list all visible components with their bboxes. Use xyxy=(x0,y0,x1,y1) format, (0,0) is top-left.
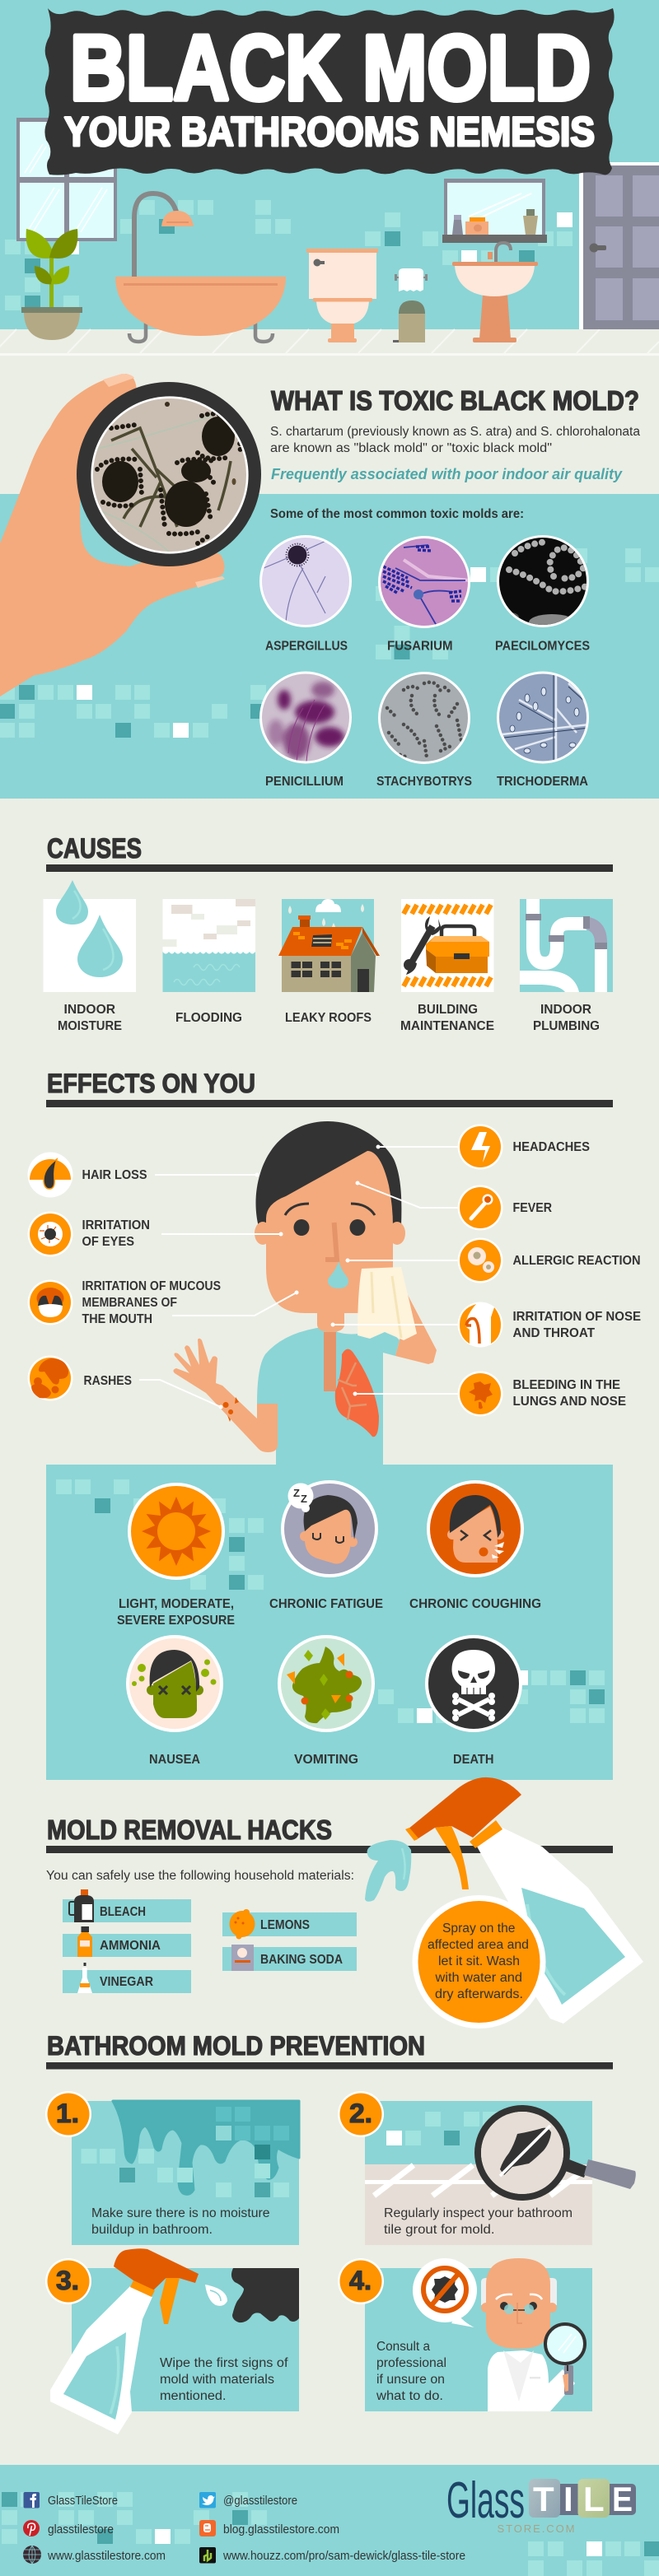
label: allergic reaction: ALLERGIC REACTION xyxy=(512,1254,641,1268)
social: facebook: GlassTileStore xyxy=(48,2494,118,2508)
material: vinegar xyxy=(63,1963,191,1993)
step 3 card xyxy=(50,2248,299,2434)
step 1 number xyxy=(45,2091,91,2137)
social: facebook xyxy=(23,2492,118,2508)
section: effects on you xyxy=(46,1069,613,1107)
cause label: indoor plumbing xyxy=(533,1003,600,1033)
step 3 card: mentioned. xyxy=(160,2389,226,2403)
step 3 card: Wipe the first signs of xyxy=(160,2356,288,2370)
teal highlight: Frequently associated with poor indoor air quality xyxy=(271,466,623,482)
doctor xyxy=(481,2258,585,2411)
label: irritation of eyes: IRRITATION xyxy=(82,1218,150,1232)
website globe: www.glasstilestore.com xyxy=(47,2550,166,2563)
icon: chronic fatigue xyxy=(281,1480,378,1577)
toilet xyxy=(306,249,378,342)
material: vinegar: VINEGAR xyxy=(100,1975,153,1989)
label: irritation of eyes: OF EYES xyxy=(82,1235,134,1249)
material: baking soda: BAKING SODA xyxy=(260,1953,343,1967)
hand holding magnifying lens xyxy=(0,374,261,696)
cause label: indoor moisture: INDOOR xyxy=(64,1003,115,1017)
window xyxy=(16,118,117,241)
social: blogger: blog.glasstilestore.com xyxy=(223,2523,339,2536)
bottle liquid xyxy=(521,1888,625,2005)
label: irritation of mucous membranes: IRRITATION OF MUCOUS xyxy=(82,1279,221,1293)
step 4 card xyxy=(365,2258,592,2411)
material: lemons xyxy=(222,1909,357,1940)
social: pinterest: glasstilestore xyxy=(48,2523,114,2536)
plant xyxy=(21,229,82,340)
material: bleach: BLEACH xyxy=(100,1905,146,1919)
step 3 number xyxy=(45,2258,91,2304)
label: vomiting: VOMITING xyxy=(294,1753,358,1767)
right effect icons and labels xyxy=(458,1125,641,1416)
social: twitter: @glasstilestore xyxy=(223,2494,297,2508)
icon: irritation of eyes xyxy=(28,1212,72,1256)
door xyxy=(579,162,659,329)
icon: rashes xyxy=(28,1355,72,1401)
paecilomyces xyxy=(497,535,589,631)
spray splash xyxy=(365,1840,411,1902)
label: exposure: SEVERE EXPOSURE xyxy=(117,1614,235,1628)
effects rule xyxy=(46,1100,613,1107)
label: fever: FEVER xyxy=(512,1201,552,1215)
logo: Glass Tile Store: E xyxy=(612,2480,633,2518)
logo: Glass Tile Store: T xyxy=(533,2480,554,2518)
step 3 number: 3. xyxy=(56,2266,79,2295)
callout: spray instructions: Spray on the xyxy=(442,1922,516,1935)
icon: vomiting xyxy=(278,1635,375,1732)
step 1 card: buildup in bathroom. xyxy=(91,2223,213,2237)
label: irritation of nose and throat: AND THROAT xyxy=(512,1326,596,1340)
step 2 card xyxy=(365,2101,636,2245)
left effect icons and labels xyxy=(28,1153,221,1401)
trachea and lung xyxy=(324,1332,379,1437)
magnifying glass xyxy=(474,2105,636,2201)
title banner: mold shape xyxy=(44,8,615,175)
step 4 card: professional xyxy=(376,2356,446,2370)
step 1 number: 1. xyxy=(56,2099,79,2128)
material: bleach xyxy=(63,1889,191,1922)
step 4 card: if unsure on xyxy=(376,2373,445,2387)
header scene: bathroom xyxy=(0,0,659,356)
label: death: DEATH xyxy=(453,1753,494,1767)
list intro: Some of the most common toxic molds are: xyxy=(270,507,524,521)
neck xyxy=(317,1305,344,1332)
floor xyxy=(0,329,659,356)
subtitle: YOUR BATHROOMS NEMESIS xyxy=(64,109,595,155)
section intro: what is toxic black mold xyxy=(270,385,640,521)
connector lines xyxy=(139,1144,458,1409)
step 4 number: 4. xyxy=(349,2266,372,2295)
logo: Glass Tile Store: I xyxy=(563,2480,573,2518)
stachybotrys xyxy=(378,672,470,764)
callout: spray instructions xyxy=(412,1895,545,2029)
material: ammonia xyxy=(63,1926,191,1957)
nose xyxy=(325,1223,337,1260)
label: bleeding xyxy=(512,1378,626,1409)
logo: Glass Tile Store: L xyxy=(583,2480,605,2518)
right arm xyxy=(395,1295,437,1364)
step 1 card xyxy=(72,2101,299,2245)
spray bottle xyxy=(365,1777,643,2024)
causes heading: CAUSES xyxy=(47,833,142,864)
section: causes xyxy=(43,833,613,1033)
step 2 card: Regularly inspect your bathroom xyxy=(384,2206,573,2220)
left arm and hand xyxy=(173,1339,278,1452)
section: mold removal hacks xyxy=(46,1777,643,2029)
step 4 card: what to do. xyxy=(376,2389,443,2403)
bathtub xyxy=(115,193,286,342)
mold gallery xyxy=(259,535,590,789)
label: exposure xyxy=(117,1597,235,1628)
callout: spray instructions: affected area and xyxy=(428,1938,529,1952)
wall xyxy=(0,0,659,329)
toilet paper xyxy=(395,268,428,291)
icon: headaches xyxy=(458,1125,502,1169)
step 4 number xyxy=(338,2258,384,2304)
paecilomyces label: PAECILOMYCES xyxy=(495,639,590,654)
cause card: indoor plumbing xyxy=(520,899,613,992)
cause card: flooding xyxy=(163,899,255,992)
trash can xyxy=(393,300,425,342)
hacks intro text: You can safely use the following household materials: xyxy=(46,1869,354,1883)
penicillium label: PENICILLIUM xyxy=(265,775,344,789)
step 3 card: mold with materials xyxy=(160,2373,274,2387)
mirror and shelf xyxy=(442,179,547,243)
icon: death skull xyxy=(425,1635,522,1732)
social: pinterest xyxy=(23,2520,114,2536)
teal band: toxic molds background xyxy=(0,494,659,799)
penicillium xyxy=(259,671,352,764)
band tiles xyxy=(0,548,659,738)
towel xyxy=(358,1267,417,1340)
nose drip xyxy=(328,1261,348,1288)
step 2 card: tile grout for mold. xyxy=(384,2223,494,2237)
effects panel background xyxy=(46,1465,613,1780)
bottle body xyxy=(477,1828,643,2024)
step 2 number: 2. xyxy=(349,2099,372,2128)
material: lemons: LEMONS xyxy=(260,1918,310,1932)
icon: allergic reaction xyxy=(458,1238,502,1283)
wall tiles xyxy=(5,200,573,310)
label: chronic coughing: CHRONIC COUGHING xyxy=(409,1597,541,1611)
footer xyxy=(0,2465,659,2576)
label: hair loss: HAIR LOSS xyxy=(82,1168,147,1182)
cause label: flooding: FLOODING xyxy=(175,1011,242,1025)
callout: spray instructions: with water and xyxy=(434,1971,522,1985)
hacks heading: MOLD REMOVAL HACKS xyxy=(47,1814,332,1845)
label: bleeding: BLEEDING IN THE xyxy=(512,1378,620,1392)
panel: symptoms xyxy=(56,1479,605,1767)
person figure xyxy=(173,1121,437,1474)
stachybotrys label: STACHYBOTRYS xyxy=(376,775,472,789)
houzz: www.houzz.com/pro/sam-dewick/glass-tile-store xyxy=(222,2550,465,2563)
icon: exposure sun xyxy=(128,1483,225,1580)
ears xyxy=(255,1222,271,1245)
description line 1: S. chartarum (previously known as S. atra) and S. chlorohalonata xyxy=(270,425,640,439)
label: irritation of mucous membranes: MEMBRANES OF xyxy=(82,1296,177,1310)
icon: hair loss xyxy=(28,1153,72,1197)
fingernails xyxy=(103,374,225,588)
panel tiles xyxy=(56,1479,605,1723)
footer background xyxy=(0,2465,659,2576)
icon: mucous membranes xyxy=(28,1279,72,1325)
icon: nausea xyxy=(126,1635,223,1732)
face xyxy=(266,1151,393,1313)
section: bathroom mold prevention xyxy=(45,2031,636,2434)
website globe xyxy=(23,2546,166,2564)
cause card: building maintenance xyxy=(401,899,494,992)
step 1 card: Make sure there is no moisture xyxy=(91,2206,270,2220)
icon: chronic fatigue: Z xyxy=(293,1487,300,1499)
bottle head xyxy=(408,1777,521,1840)
body shirt xyxy=(257,1327,400,1474)
logo: Glass Tile Store: STORE.COM xyxy=(498,2522,575,2535)
cause label: indoor moisture: MOISTURE xyxy=(58,1019,122,1033)
label: bleeding: LUNGS AND NOSE xyxy=(512,1395,626,1409)
cause label: building maintenance: BUILDING xyxy=(418,1003,478,1017)
causes rule xyxy=(46,864,613,872)
label: nausea: NAUSEA xyxy=(149,1753,200,1767)
icon: fever xyxy=(458,1186,502,1230)
neck over shirt xyxy=(317,1313,344,1332)
fusarium xyxy=(378,536,470,628)
cause label: leaky roofs: LEAKY ROOFS xyxy=(285,1011,372,1025)
aspergillus xyxy=(259,535,352,634)
effects heading: EFFECTS ON YOU xyxy=(47,1069,255,1098)
rash spots xyxy=(223,1397,239,1422)
cause label: building maintenance: MAINTENANCE xyxy=(400,1019,494,1033)
icon: bleeding xyxy=(458,1372,502,1416)
label: irritation of eyes xyxy=(82,1218,150,1249)
label: chronic fatigue: CHRONIC FATIGUE xyxy=(269,1597,383,1611)
hair xyxy=(255,1121,401,1227)
step 4 card: Consult a xyxy=(376,2340,430,2354)
spray bottle xyxy=(50,2248,199,2434)
cause card: indoor moisture xyxy=(43,880,136,992)
trichoderma xyxy=(497,671,589,764)
icon: nose and throat xyxy=(458,1302,502,1347)
cause label: indoor moisture xyxy=(58,1003,122,1033)
prevention rule xyxy=(46,2062,613,2070)
social: blogger xyxy=(199,2520,339,2536)
microscope photo xyxy=(91,395,249,555)
hacks rule xyxy=(46,1846,613,1853)
footer tiles xyxy=(2,2492,659,2576)
icon: chronic fatigue: Z xyxy=(301,1493,307,1505)
sink xyxy=(452,243,538,342)
material: ammonia: AMMONIA xyxy=(100,1939,161,1953)
eyes and brows xyxy=(285,1204,375,1236)
social: twitter xyxy=(199,2492,297,2508)
description line 2: are known as "black mold" or "toxic black mold" xyxy=(270,441,552,455)
hand xyxy=(0,374,225,696)
trichoderma label: TRICHODERMA xyxy=(497,775,588,789)
logo: Glass Tile Store: Glass xyxy=(446,2472,525,2529)
callout: spray instructions: let it sit. Wash xyxy=(438,1954,520,1968)
speech bubble: no mold xyxy=(413,2258,477,2327)
cause label: indoor plumbing: INDOOR xyxy=(540,1003,591,1017)
label: exposure: LIGHT, MODERATE, xyxy=(119,1597,234,1611)
step 2 number xyxy=(338,2091,384,2137)
lens xyxy=(77,382,261,566)
label: irritation of mucous membranes: THE MOUTH xyxy=(82,1312,152,1326)
label: headaches: HEADACHES xyxy=(512,1140,590,1154)
label: irritation of mucous membranes xyxy=(82,1279,221,1326)
cause card: leaky roofs xyxy=(278,899,380,992)
material: baking soda xyxy=(222,1945,357,1971)
fusarium label: FUSARIUM xyxy=(387,639,453,654)
prevention heading: BATHROOM MOLD PREVENTION xyxy=(47,2031,425,2061)
callout: spray instructions: dry afterwards. xyxy=(435,1987,523,2001)
label: rashes: RASHES xyxy=(84,1374,132,1388)
cause label: indoor plumbing: PLUMBING xyxy=(533,1019,600,1033)
label: irritation of nose and throat xyxy=(512,1310,641,1340)
logo: Glass Tile Store xyxy=(446,2472,636,2535)
label: irritation of nose and throat: IRRITATION OF NOSE xyxy=(512,1310,641,1324)
icon: chronic coughing xyxy=(427,1480,524,1577)
aspergillus label: ASPERGILLUS xyxy=(265,639,348,654)
cause label: building maintenance xyxy=(400,1003,494,1033)
